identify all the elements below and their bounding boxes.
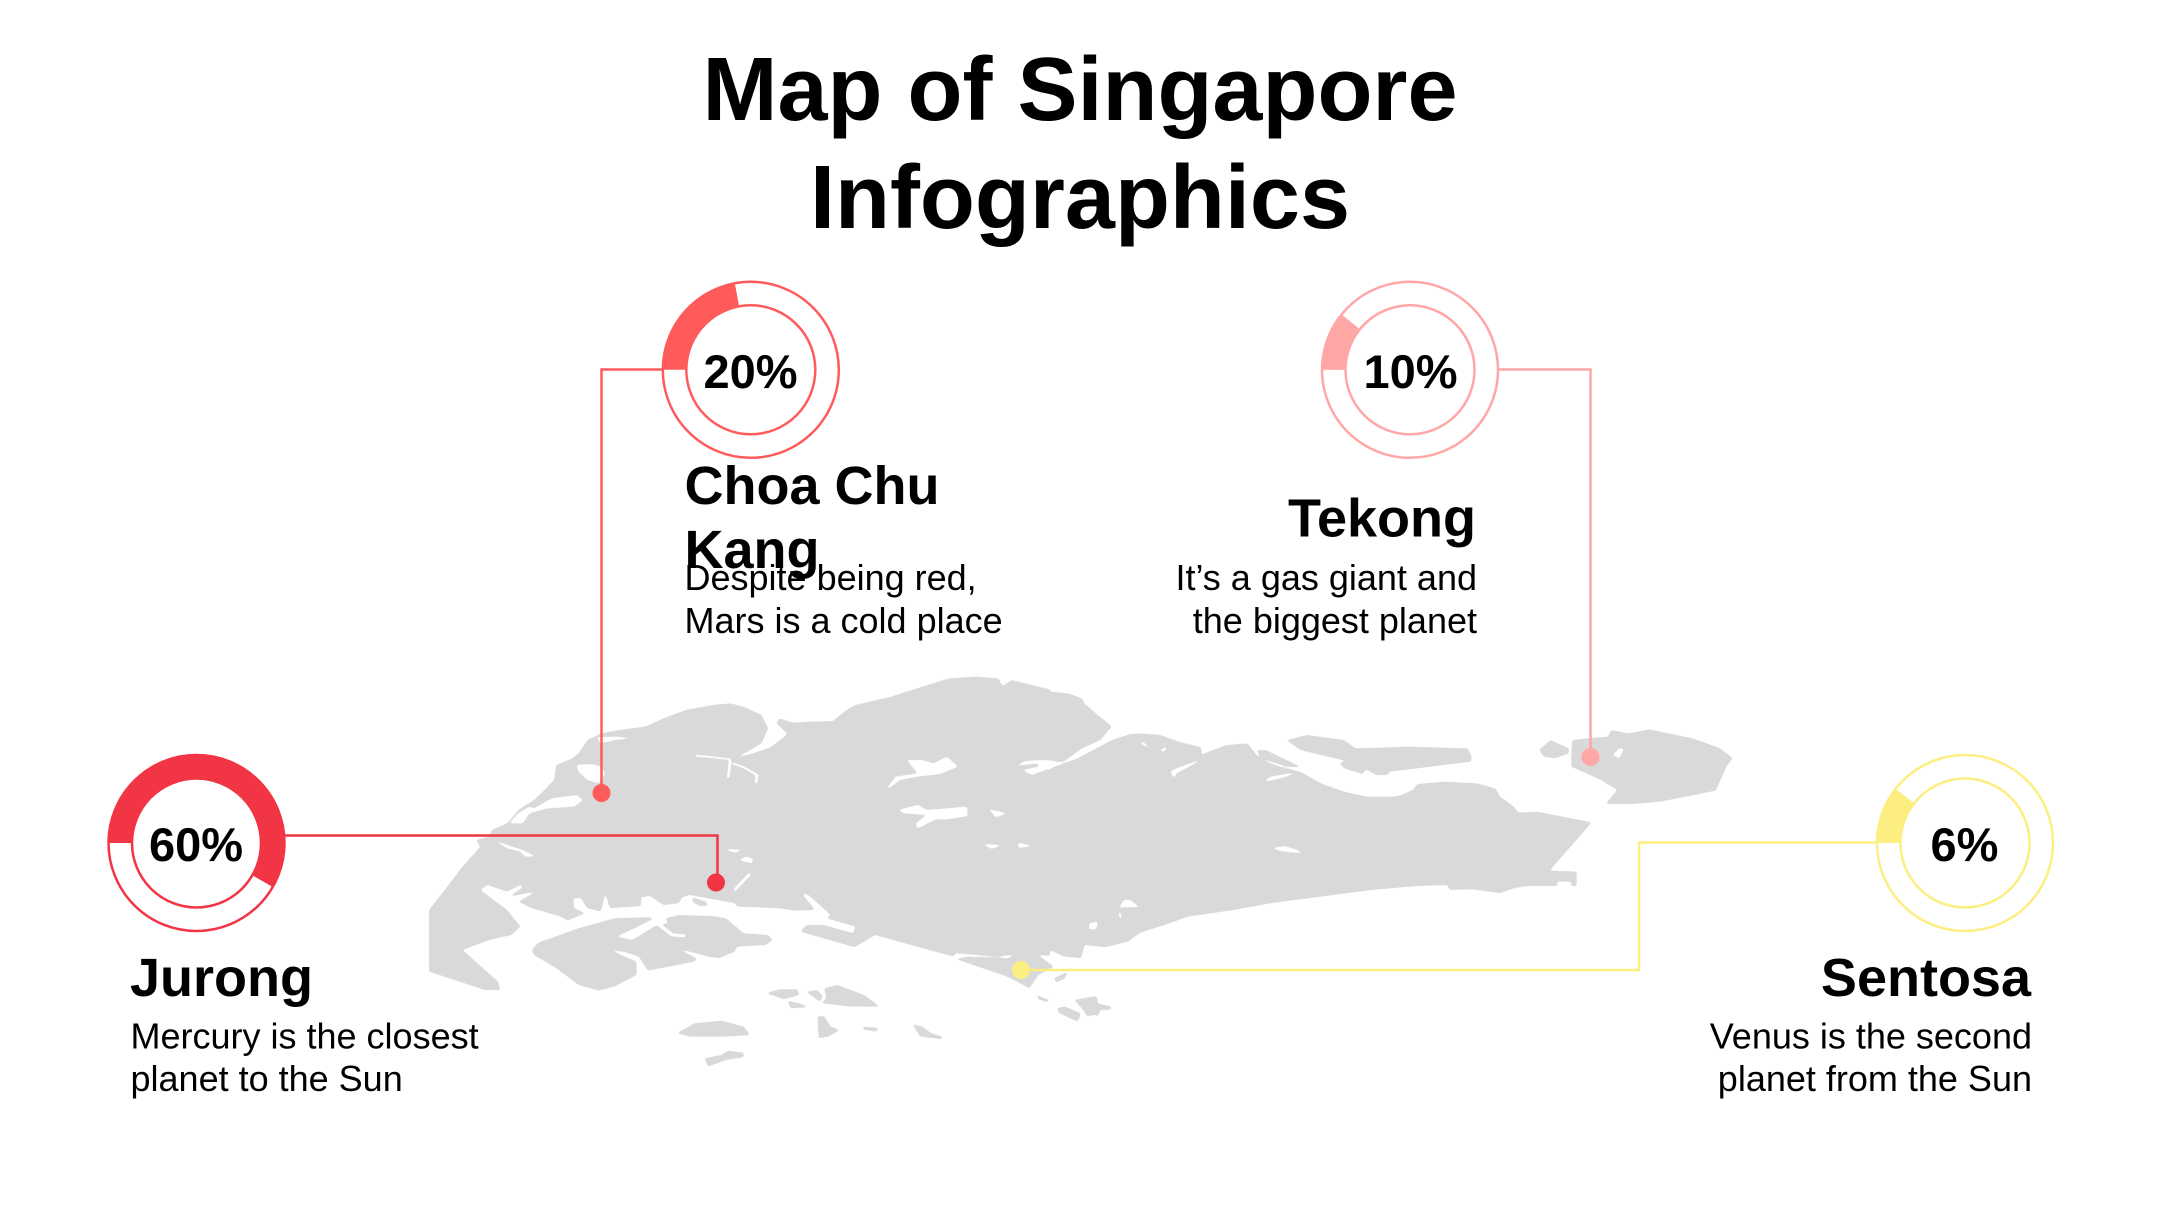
callout: Choa Chu Kang [592, 282, 1003, 802]
description: Venus is the second [1710, 1016, 2032, 1056]
heading: Tekong [1288, 488, 1476, 548]
callout: Tekong [1175, 282, 1600, 766]
title: Infographics [810, 148, 1350, 248]
heading: Sentosa [1821, 948, 2032, 1008]
donut: 60% [108, 755, 284, 931]
percent label: 10% [1363, 345, 1458, 398]
description: Mercury is the closest [130, 1016, 479, 1056]
heading: Kang [684, 520, 820, 580]
description: It’s a gas giant and [1175, 557, 1477, 598]
heading: Jurong [130, 948, 313, 1008]
connector: Jurong [285, 836, 725, 892]
percent label: 6% [1931, 818, 1998, 871]
description: Mars is a cold place [684, 600, 1003, 641]
connector: Tekong [1498, 370, 1600, 766]
callout: Jurong [108, 755, 725, 1099]
donut: 20% [663, 282, 839, 458]
percent label: 60% [149, 818, 243, 871]
title [702, 40, 1458, 248]
description: planet from the Sun [1718, 1058, 2032, 1099]
donut: 10% [1322, 282, 1498, 458]
description: Despite being red, [684, 557, 977, 598]
heading: Choa Chu [684, 456, 939, 516]
map of Singapore [425, 670, 1745, 1080]
description: the biggest planet [1193, 600, 1477, 641]
title: Map of Singapore [702, 40, 1458, 140]
donut: 6% [1877, 755, 2053, 931]
percent label: 20% [703, 345, 798, 398]
connector: Sentosa [1012, 842, 1877, 979]
connector: Choa Chu Kang [592, 370, 663, 802]
callout: Sentosa [1012, 755, 2053, 1099]
description: planet to the Sun [130, 1058, 403, 1099]
